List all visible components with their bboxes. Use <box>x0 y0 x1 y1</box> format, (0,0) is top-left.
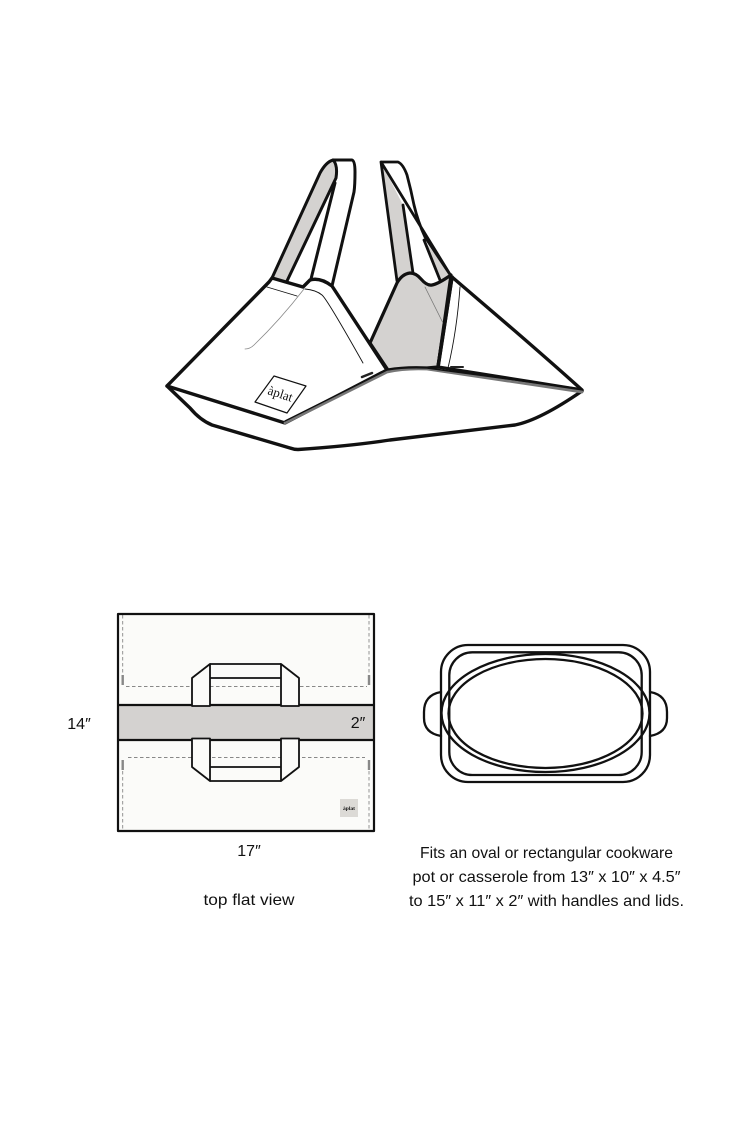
fit description: Fits an oval or rectangular cookware <box>420 845 673 862</box>
stitch lines <box>123 615 369 830</box>
logo patch <box>255 376 306 413</box>
top flat view diagram <box>118 614 374 831</box>
upper panel <box>118 614 374 706</box>
label top flat view: top flat view <box>204 892 295 909</box>
label 2 inch: 2″ <box>351 715 366 732</box>
oval outer <box>442 654 650 772</box>
lower handle tabs <box>192 738 299 781</box>
lower panel <box>118 740 374 831</box>
label 17 inch: 17″ <box>237 843 261 860</box>
pot inner rim <box>449 652 642 775</box>
stitch bars <box>123 675 369 770</box>
label 14 inch: 14″ <box>67 716 91 733</box>
inner panel <box>370 273 451 370</box>
left handle <box>272 160 355 286</box>
tag: àplat <box>343 806 355 812</box>
right panel <box>438 277 582 390</box>
base edge bands <box>285 368 582 423</box>
logo patch: àplat <box>266 383 295 405</box>
fit description: to 15″ x 11″ x 2″ with handles and lids. <box>409 893 684 910</box>
small stitched labels <box>362 367 463 377</box>
oval inner <box>448 659 642 768</box>
handle straps <box>210 664 281 781</box>
fit description <box>409 845 684 910</box>
cookware diagram <box>424 645 667 782</box>
frame <box>118 614 374 831</box>
left panel <box>167 278 387 423</box>
pot handles <box>424 692 667 736</box>
illustration: open tote bag <box>167 160 582 450</box>
right handle <box>381 162 451 282</box>
bag base underside <box>167 386 582 450</box>
tag <box>340 799 358 817</box>
fit description: pot or casserole from 13″ x 10″ x 4.5″ <box>412 869 681 886</box>
gusset band <box>118 705 374 740</box>
pot outer rim <box>441 645 650 782</box>
upper handle tabs <box>192 664 299 706</box>
